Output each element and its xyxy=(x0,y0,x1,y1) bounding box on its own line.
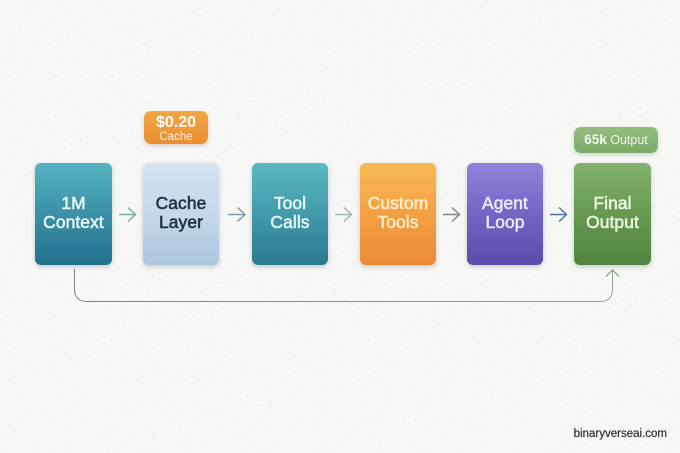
card: Final Output xyxy=(574,163,651,265)
badge: 65k Output: 65k Output xyxy=(584,132,648,147)
arrow: agent to final xyxy=(550,208,566,222)
card: Agent Loop: Loop xyxy=(485,212,525,232)
badge: $0.20 Cache xyxy=(144,111,208,144)
feedback arrow: context to final output xyxy=(74,269,619,302)
badge: $0.20 Cache: Cache xyxy=(159,131,193,143)
arrow: context to cache xyxy=(119,208,136,222)
arrow: custom to agent xyxy=(443,208,460,222)
card: Final Output: Final xyxy=(593,192,632,212)
card: Custom Tools: Custom xyxy=(368,192,428,212)
arrow: cache to tools xyxy=(228,208,245,222)
card: Agent Loop xyxy=(467,163,543,265)
card: Cache Layer: Layer xyxy=(159,212,203,232)
card: Cache Layer xyxy=(143,163,219,265)
card: Custom Tools: Tools xyxy=(377,212,419,232)
arrow: tools to custom xyxy=(335,208,352,222)
watermark: binaryverseai.com: binaryverseai.com xyxy=(574,428,667,440)
card: 1M Context: Context xyxy=(43,212,104,232)
badge: $0.20 Cache: $0.20 xyxy=(156,114,196,130)
card: Agent Loop: Agent xyxy=(482,192,528,212)
card: Tool Calls: Tool xyxy=(274,192,306,212)
card: Final Output: Output xyxy=(586,212,639,232)
card: Cache Layer: Cache xyxy=(156,192,206,212)
card: 1M Context xyxy=(35,163,112,265)
card: Custom Tools xyxy=(360,163,436,265)
card: Tool Calls xyxy=(252,163,328,265)
badge: 65k Output xyxy=(574,127,658,153)
card: 1M Context: 1M xyxy=(61,192,86,212)
card: Tool Calls: Calls xyxy=(270,212,310,232)
